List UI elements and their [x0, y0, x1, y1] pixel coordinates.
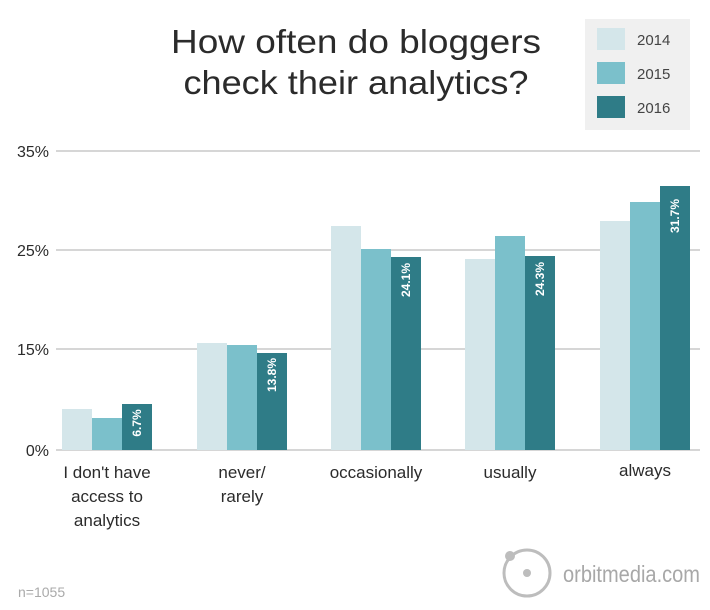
- y axis labels and gridlines: 35%: [17, 144, 49, 161]
- category labels: I don't have: [63, 463, 151, 482]
- value labels: [130, 199, 682, 437]
- sample size: n=1055: [18, 584, 65, 600]
- bar chart: [62, 186, 690, 450]
- y axis labels and gridlines: 0%: [26, 443, 49, 460]
- category labels: analytics: [74, 511, 140, 530]
- y axis labels and gridlines: [17, 144, 700, 460]
- legend: 2015: [637, 66, 670, 83]
- value labels: 24.3%: [533, 262, 547, 296]
- category labels: occasionally: [330, 463, 423, 482]
- title: check their analytics?: [184, 64, 528, 101]
- title: How often do bloggers: [171, 23, 541, 60]
- value labels: 6.7%: [130, 409, 144, 437]
- category labels: [63, 461, 671, 530]
- value labels: 24.1%: [399, 263, 413, 297]
- y axis labels and gridlines: 25%: [17, 243, 49, 260]
- value labels: 31.7%: [668, 199, 682, 233]
- category labels: usually: [484, 463, 537, 482]
- legend: 2016: [637, 100, 670, 117]
- legend: [585, 19, 690, 130]
- category labels: rarely: [221, 487, 264, 506]
- legend: 2014: [637, 32, 670, 49]
- category labels: never/: [218, 463, 266, 482]
- logo: [504, 550, 700, 596]
- title: [171, 23, 541, 101]
- value labels: 13.8%: [265, 358, 279, 392]
- category labels: access to: [71, 487, 143, 506]
- y axis labels and gridlines: 15%: [17, 342, 49, 359]
- category labels: always: [619, 461, 671, 480]
